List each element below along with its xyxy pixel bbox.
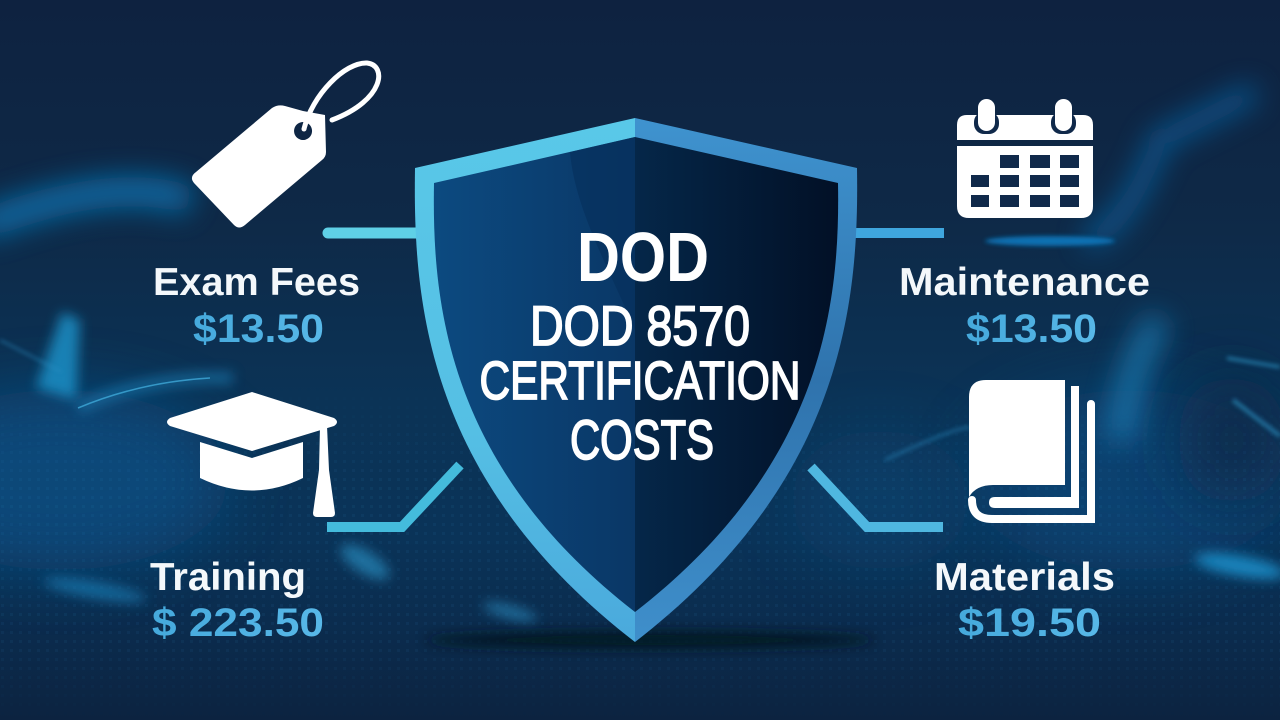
label: exam fees: Exam Fees bbox=[153, 261, 360, 304]
shield face left bbox=[434, 137, 635, 612]
shield bezel left bbox=[415, 118, 635, 642]
shield bezel right bbox=[635, 118, 857, 642]
label: maintenance bbox=[899, 261, 1150, 351]
shield title: CERTIFICATION bbox=[480, 351, 800, 411]
shield bbox=[415, 118, 857, 642]
shield title: COSTS bbox=[570, 408, 714, 471]
icon: book bbox=[969, 380, 1091, 519]
shield title: DOD bbox=[577, 218, 709, 296]
price: training: $ 223.50 bbox=[152, 601, 324, 645]
connector: materials bbox=[811, 467, 943, 527]
shield face right bbox=[635, 137, 838, 612]
label: training: Training bbox=[150, 556, 306, 599]
shield title bbox=[480, 218, 800, 471]
label: exam fees bbox=[153, 261, 360, 351]
connector: maintenance bbox=[850, 228, 944, 238]
label: materials bbox=[934, 556, 1115, 645]
connector: training bbox=[327, 465, 460, 527]
icon: graduation cap bbox=[167, 392, 337, 517]
icon: calendar bbox=[957, 99, 1093, 218]
price: maintenance: $13.50 bbox=[966, 307, 1097, 351]
label: materials: Materials bbox=[934, 556, 1115, 599]
shield highlight bbox=[570, 137, 635, 330]
label: training bbox=[150, 556, 324, 645]
shield title: DOD 8570 bbox=[530, 294, 750, 357]
connector: exam fees bbox=[328, 228, 420, 238]
label: maintenance: Maintenance bbox=[899, 261, 1150, 304]
price: exam fees: $13.50 bbox=[193, 307, 324, 351]
icon: price tag bbox=[192, 63, 379, 228]
price: materials: $19.50 bbox=[958, 601, 1101, 645]
